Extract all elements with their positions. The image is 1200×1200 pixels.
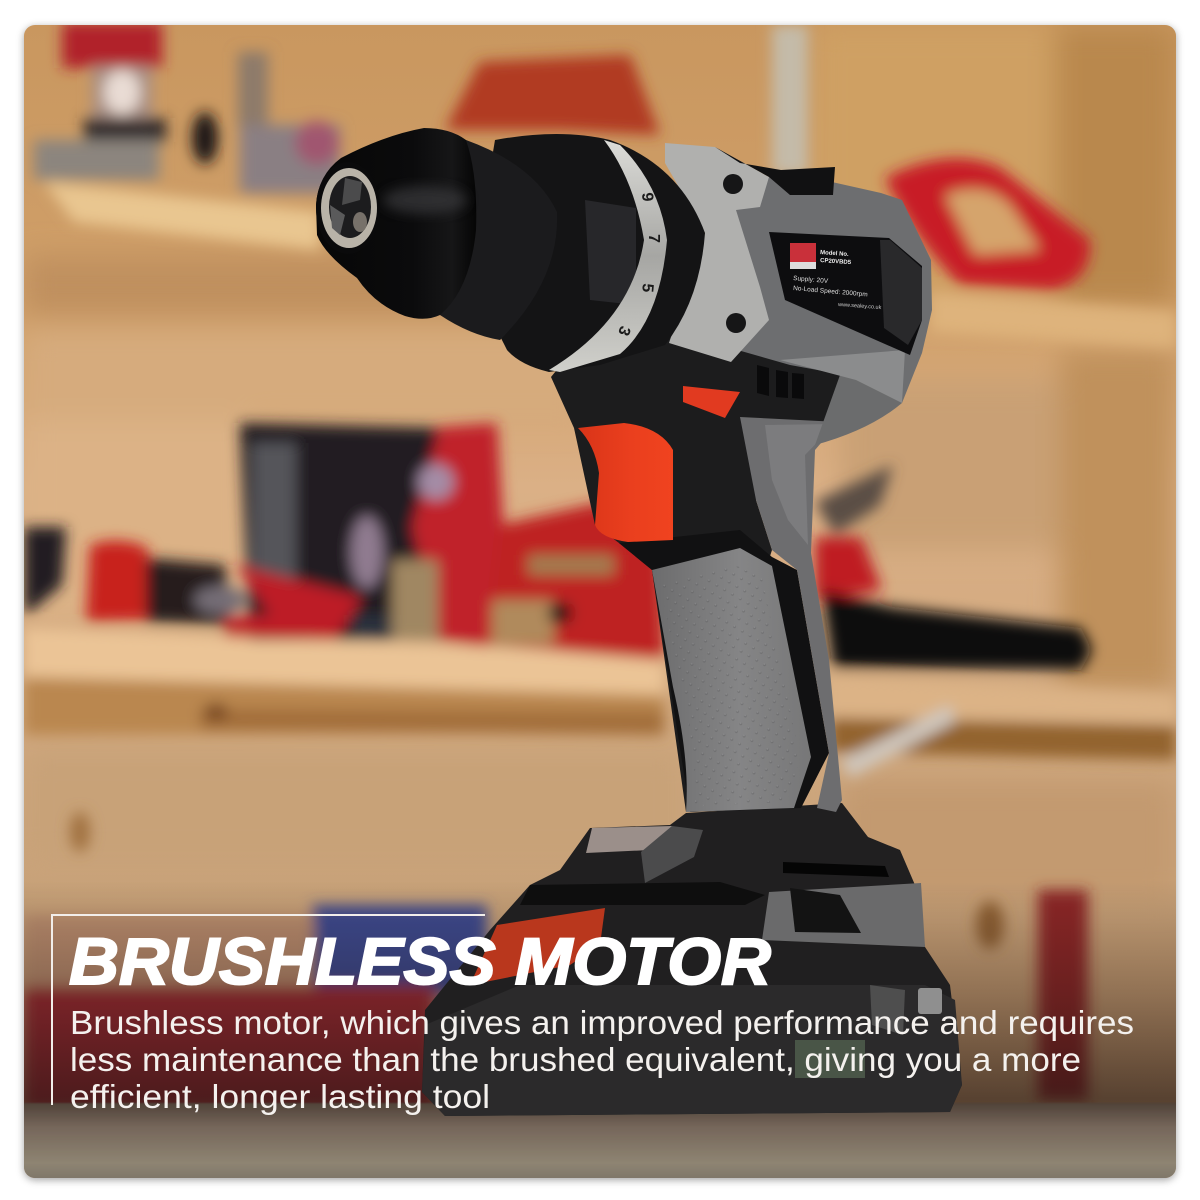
drill [316,128,962,1116]
vents [757,365,804,399]
blurred wood planks [24,25,1176,900]
info plate [769,232,922,355]
grip black strip [619,530,829,812]
chuck [316,128,502,340]
red switch [683,386,740,418]
floor-level objects [1038,890,1088,1100]
middle shelf tools [240,423,440,640]
description text [70,1004,1134,1115]
description text: efficient, longer lasting tool [70,1078,490,1115]
info plate: CP20VBD5 [820,258,852,266]
gear collar: 9 [638,192,656,202]
info plate: No-Load Speed: 2000rpm [793,285,868,299]
title: BRUSHLESS MOTOR [69,924,771,998]
body housing [736,177,932,403]
shelves [44,182,320,250]
red trigger [578,423,673,542]
gear collar [480,134,705,372]
description text: Brushless motor, which gives an improved performance and requires [70,1004,1134,1041]
handle [551,320,905,812]
motor underside [816,376,902,444]
shelf shadows [24,677,664,735]
info plate: Supply: 20V [793,275,829,285]
gear collar: 3 [614,324,633,338]
info plate: www.sealey.co.uk [837,302,882,311]
description text: less maintenance than the brushed equivalent, giving you a more [70,1041,1081,1078]
table surface [20,1103,1180,1183]
battery pack [422,803,962,1116]
top shelf tools [62,22,162,68]
top-right red saw [885,159,1090,290]
bottom dark gradient [24,898,1176,1104]
info plate: Model No. [820,250,849,258]
gear collar: 7 [645,234,662,243]
rubber grip [652,548,811,812]
decorative corner frame [51,914,485,1105]
chainsaw right [815,537,882,600]
screws [723,174,743,194]
gear collar: 5 [638,283,656,293]
gray side panel [740,417,842,812]
